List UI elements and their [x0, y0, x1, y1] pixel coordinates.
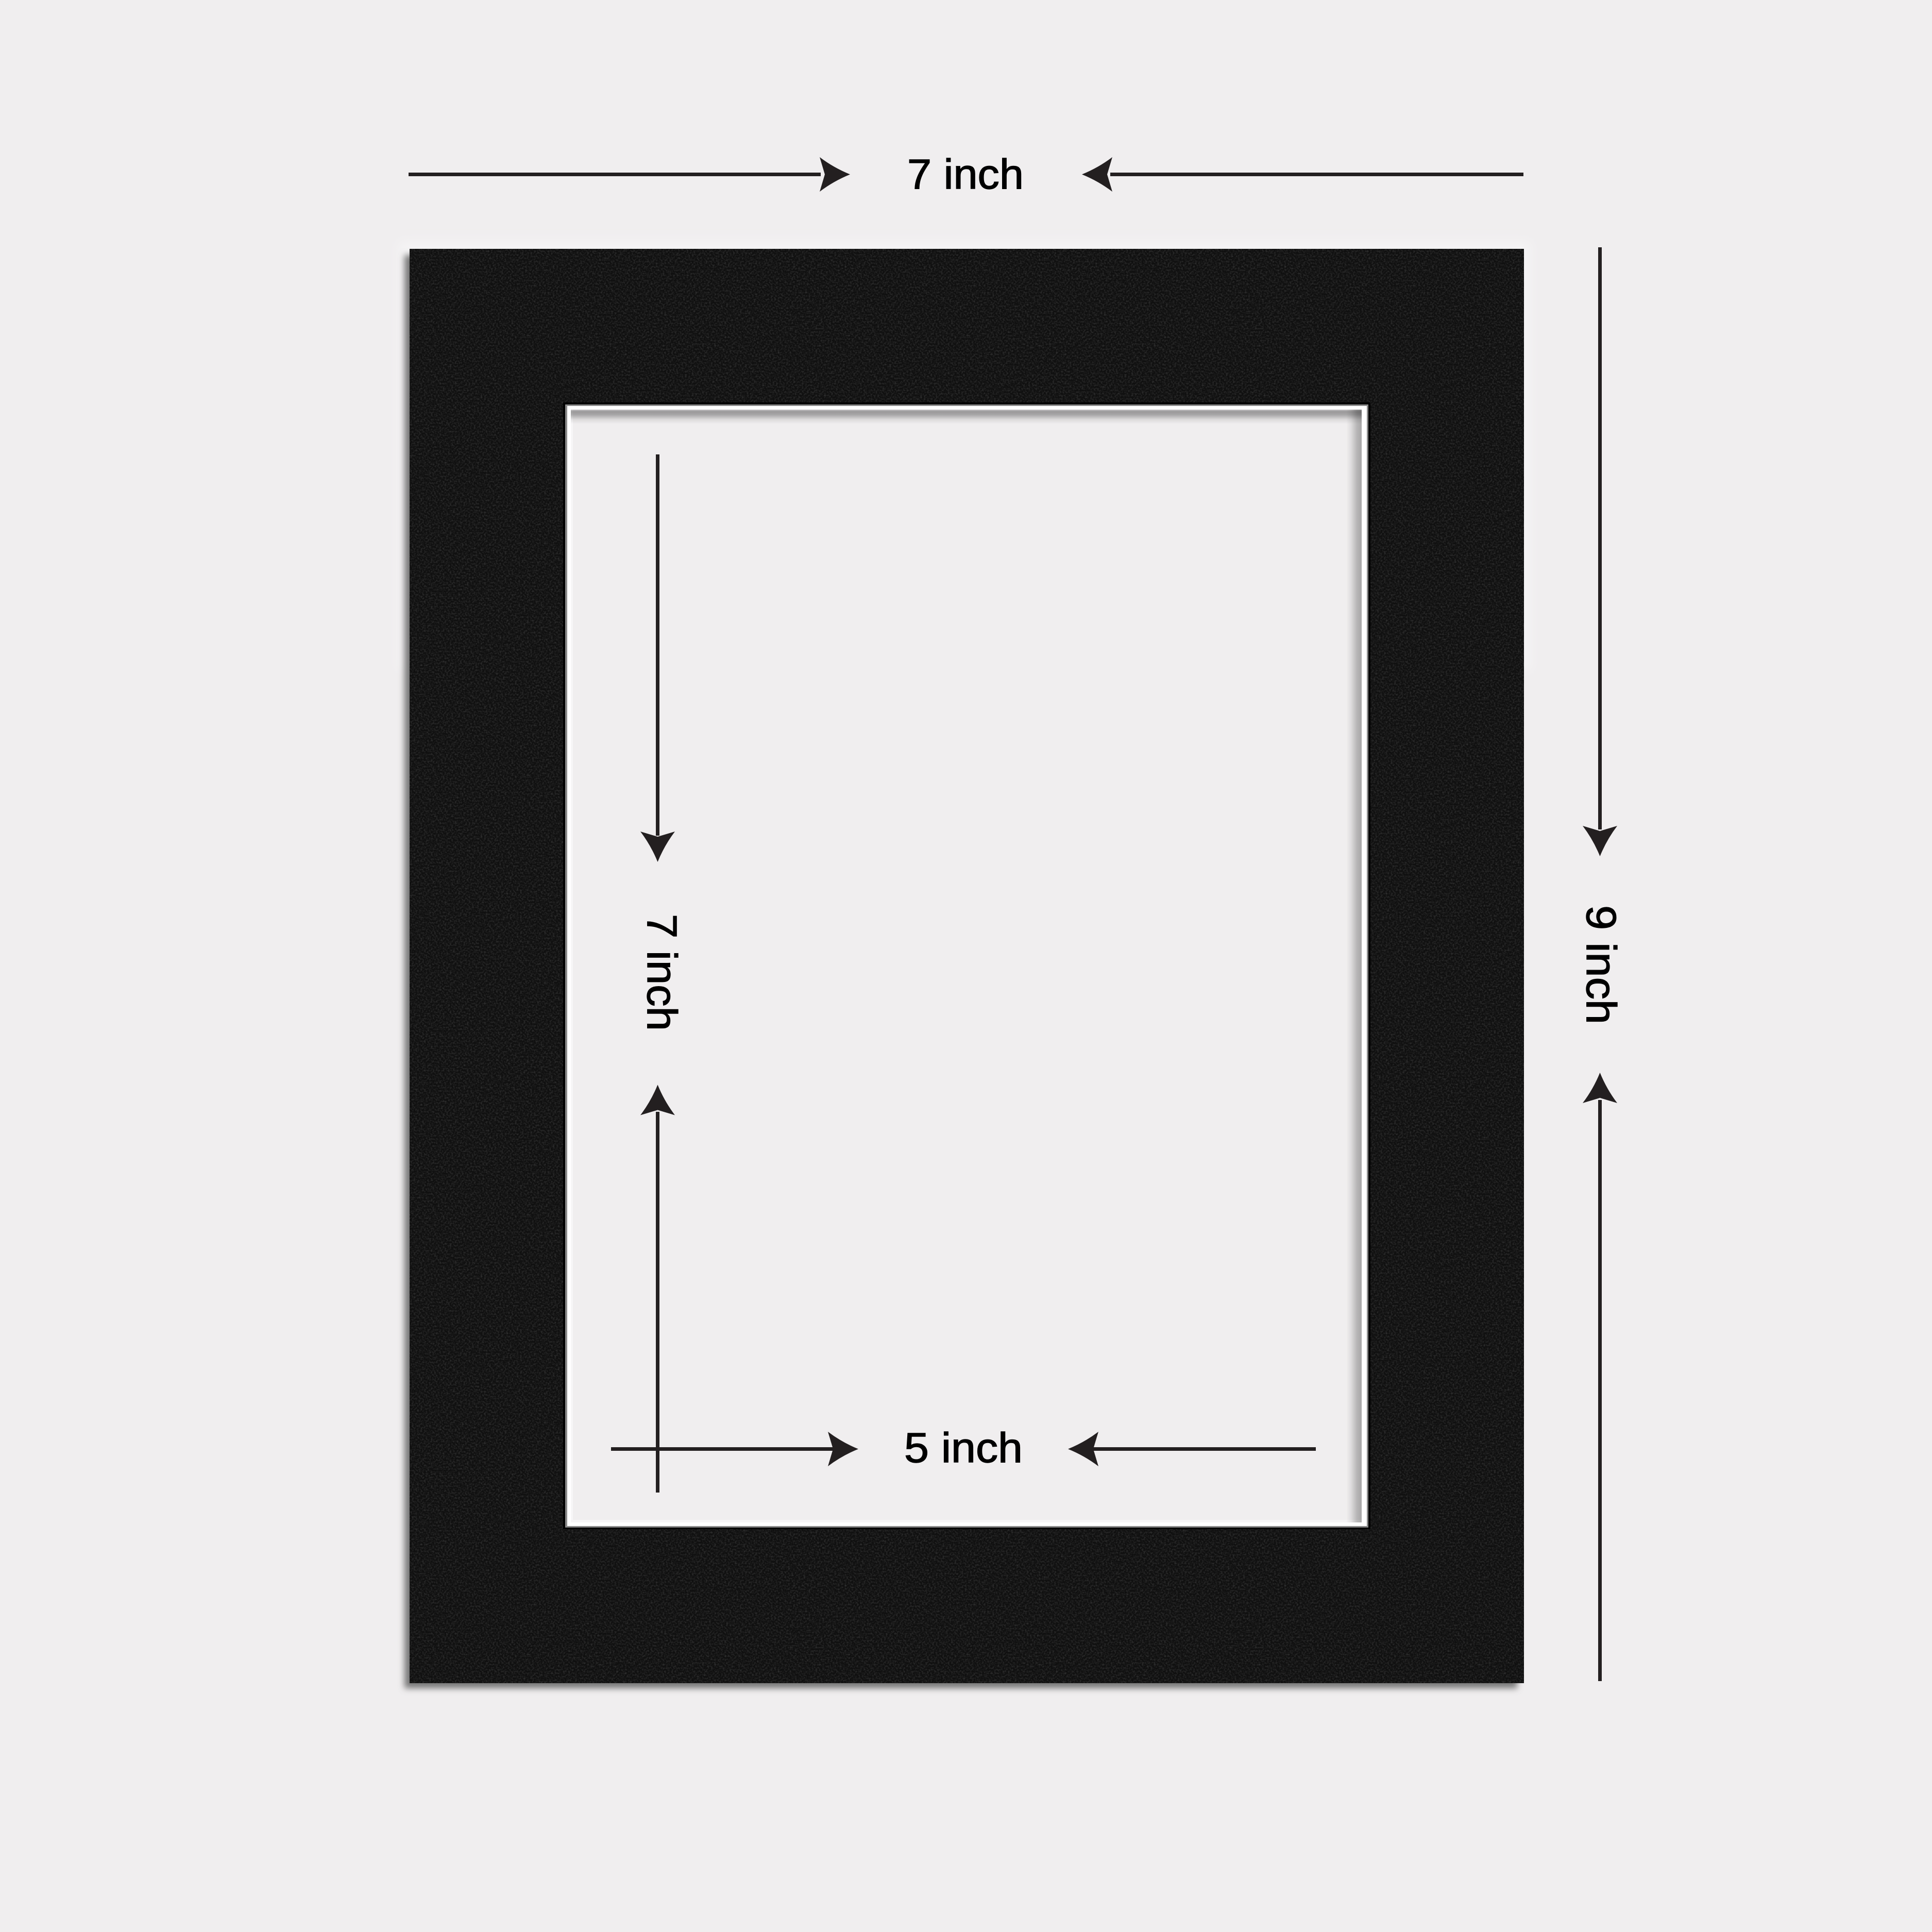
arrow: window height, lower segment	[640, 1085, 675, 1493]
arrow: window height, upper segment	[640, 454, 675, 862]
arrow: window width, right segment	[1068, 1432, 1316, 1466]
arrow: outer height, lower segment	[1583, 1073, 1617, 1681]
label: outer width 7 inch: 7 inch	[907, 151, 1024, 198]
arrow: outer height, upper segment	[1583, 247, 1617, 856]
label: window width 5 inch: 5 inch	[904, 1425, 1023, 1471]
arrow: window width, left segment	[611, 1432, 858, 1466]
window opening with bevel	[563, 402, 1370, 1529]
label: outer height 9 inch: 9 inch	[1578, 905, 1624, 1024]
arrow: top width, right segment	[1082, 157, 1523, 192]
panel: black mat board	[399, 242, 1530, 1688]
label: window height 7 inch: 7 inch	[638, 914, 685, 1031]
arrow: top width, left segment	[409, 157, 850, 192]
